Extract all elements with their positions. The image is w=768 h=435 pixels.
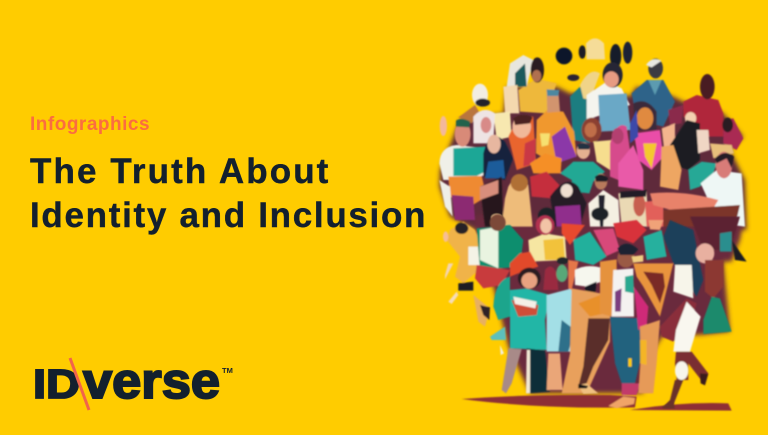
title: [30, 152, 427, 235]
lower crowd: [443, 214, 747, 407]
logo: IDVerse: verse: [83, 353, 220, 409]
title: Identity and Inclusion: [30, 196, 427, 234]
eyebrow: Infographics: Infographics: [30, 114, 150, 135]
crowd silhouette backing: [439, 87, 747, 393]
ground shadow: [462, 395, 732, 411]
title: The Truth About: [30, 152, 330, 191]
logo: IDVerse: [33, 353, 233, 410]
upper crowd: [439, 38, 745, 227]
logo: IDVerse: ID: [33, 361, 80, 407]
logo: IDVerse: TM: [222, 366, 233, 375]
